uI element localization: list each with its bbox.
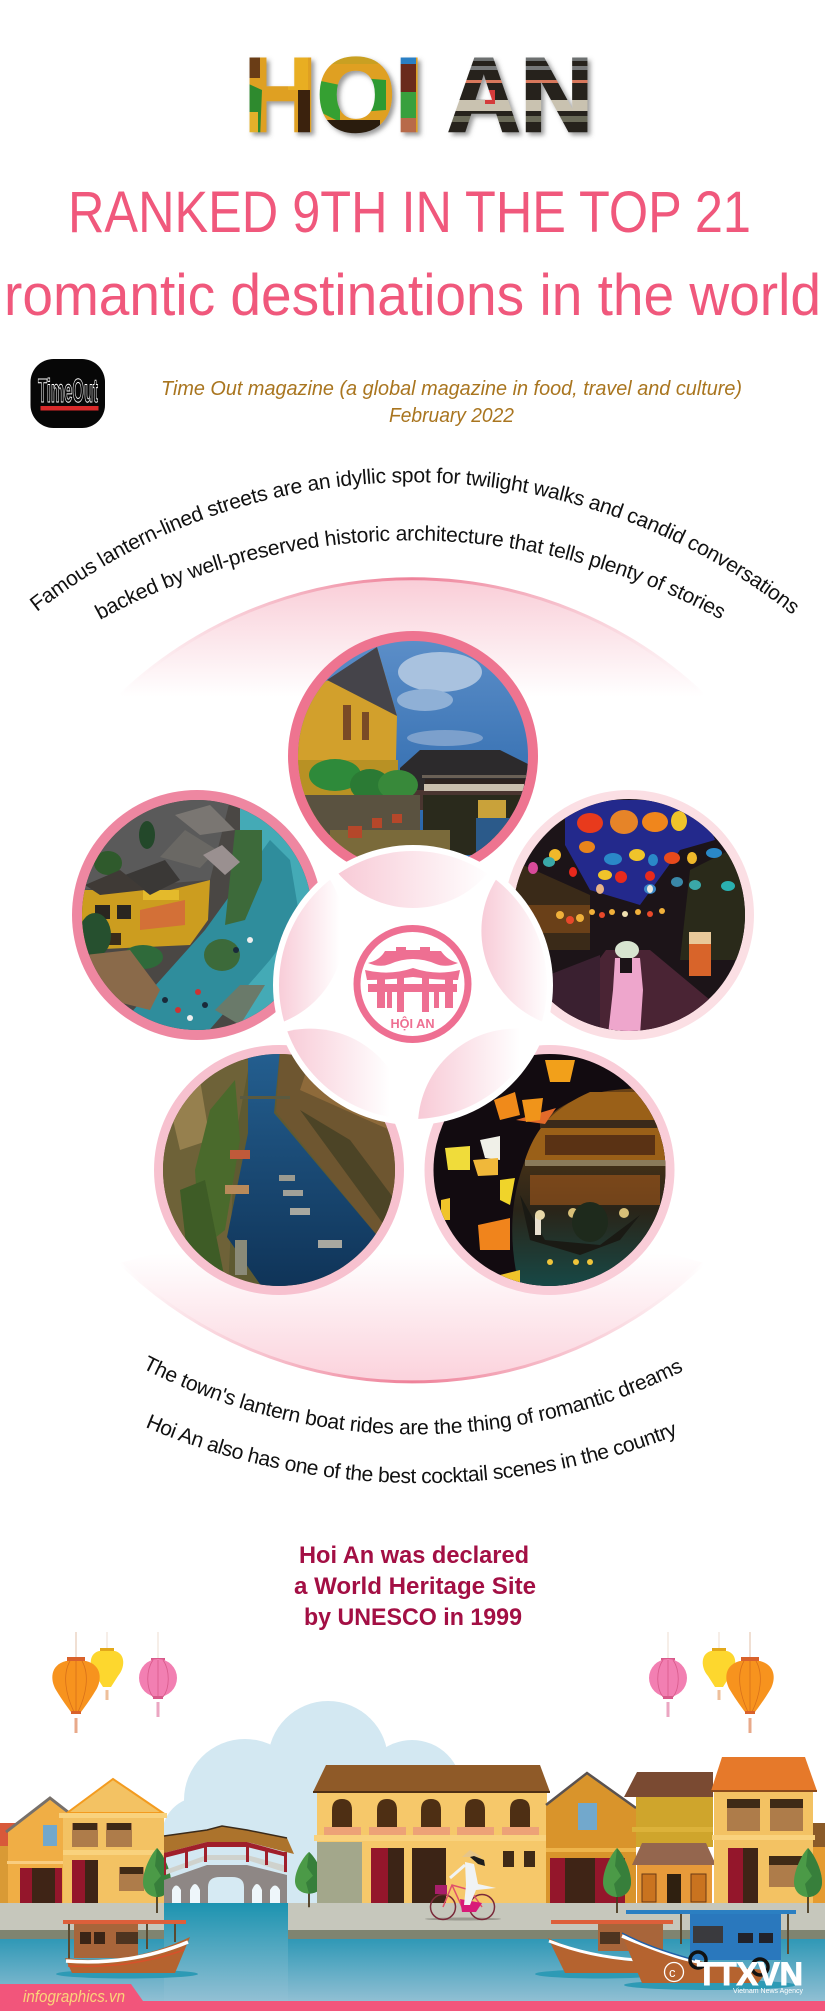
icon: Hoi An emblem: HỘI AN	[390, 1016, 434, 1031]
curved line 2: backed by well-preserved historic architecture that tells plenty of stories	[94, 525, 724, 620]
panel: bottom pink arc	[120, 1222, 704, 1382]
watermark: TTXVN	[664, 1956, 803, 1995]
photo ring: bridge and yellow house	[288, 631, 538, 881]
icon: tree	[143, 1848, 171, 1913]
callout line 1: Hoi An was declared	[299, 1542, 529, 1569]
illustration: left houses	[0, 1779, 167, 1903]
source text	[161, 378, 742, 427]
source line 1: Time Out magazine (a global magazine in food, travel and culture)	[161, 378, 742, 400]
illustration: river and quay	[0, 1903, 825, 2001]
icon: Time Out logo: TimeOut	[38, 372, 98, 409]
illustration: left boat	[56, 1920, 198, 1978]
curved line 1: Famous lantern-lined streets are an idyllic spot for twilight walks and candid conversations	[30, 468, 798, 614]
icon: small tree	[295, 1852, 323, 1907]
icon: Hoi An emblem	[357, 928, 468, 1040]
icon: tree	[794, 1848, 822, 1913]
icon: right lanterns	[649, 1632, 774, 1733]
illustration: cloud	[162, 1701, 462, 1905]
petal: left	[279, 881, 330, 1022]
callout line 3: by UNESCO in 1999	[304, 1604, 522, 1631]
petal: bottom right	[418, 1030, 504, 1119]
photo ring: aerial river	[154, 1045, 404, 1295]
illustration: covered bridge	[164, 1826, 294, 1903]
petal: bottom left	[288, 1028, 374, 1112]
watermark: TTXVN: TTXVN	[697, 1956, 803, 1992]
illustration: orange boat right	[535, 1920, 673, 1978]
watermark: TTXVN: Vietnam News Agency	[733, 1986, 803, 1995]
illustration: mustard shop house	[624, 1772, 716, 1903]
photo ring: lantern street at night	[504, 790, 754, 1040]
title: HOI AN: HOI AN	[244, 37, 593, 154]
source line 2: February 2022	[389, 405, 514, 427]
curved text: bottom	[146, 1355, 682, 1484]
curved text: top	[30, 468, 798, 620]
icon: Time Out logo	[30, 359, 105, 428]
watermark: TTXVN: c	[669, 1965, 676, 1980]
panel: top pink arc	[120, 579, 704, 748]
curved line 3: The town's lantern boat rides are the thing of romantic dreams	[146, 1355, 682, 1434]
callout line 2: a World Heritage Site	[294, 1573, 536, 1600]
icon: left lanterns	[52, 1632, 177, 1733]
icon: tree	[603, 1848, 631, 1913]
petal: top	[338, 851, 466, 908]
footer bar	[0, 1984, 825, 2011]
photo ring: aerial old town	[72, 790, 322, 1040]
curved line 4: Hoi An also has one of the best cocktail scenes in the country	[146, 1414, 674, 1484]
illustration: main arcaded building	[313, 1765, 550, 1903]
photo ring: lantern boats	[424, 1045, 674, 1295]
panel: central white disc with petals	[273, 845, 553, 1124]
headline	[4, 180, 821, 328]
footer credit: infographics.vn	[23, 1987, 125, 2006]
petal: right	[481, 880, 539, 1020]
illustration: orange gable house	[546, 1773, 636, 1903]
illustration: right orange-roof house	[711, 1757, 825, 1903]
illustration: girl on bicycle	[425, 1850, 501, 1920]
callout: UNESCO statement	[294, 1542, 536, 1631]
illustration: blue boat	[621, 1910, 796, 1990]
